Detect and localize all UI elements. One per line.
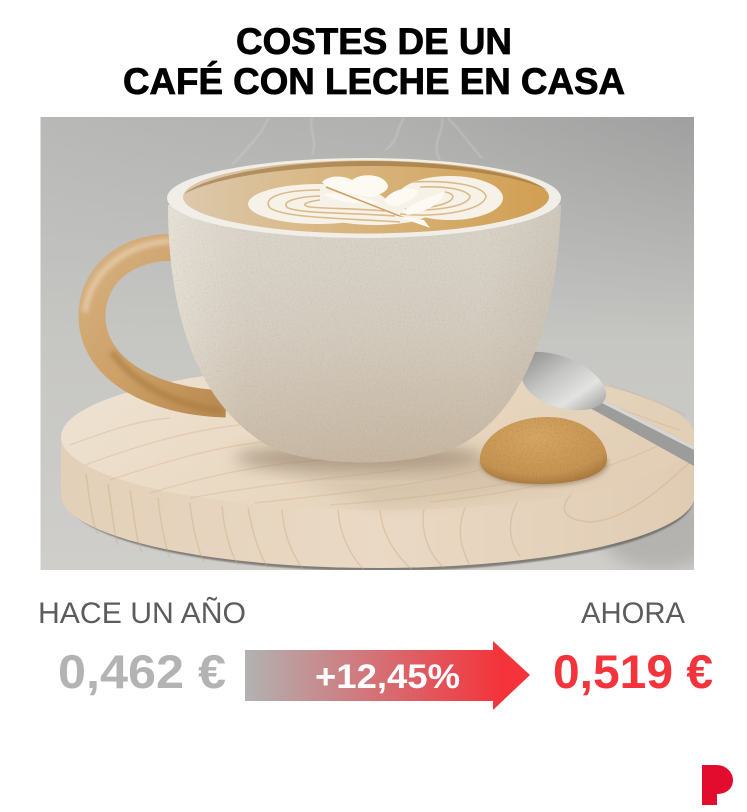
light patch and shadow on board [310, 465, 524, 508]
rosetta leaves [322, 175, 388, 197]
coffee surface [183, 160, 549, 234]
photo: cup of coffee on a wooden board [40, 117, 720, 571]
steam [232, 118, 482, 165]
arrow with percentage [245, 641, 530, 710]
spoon [521, 352, 694, 466]
label: hace un año: HACE UN AÑO [38, 596, 246, 630]
arrow with percentage: +12,45% [315, 658, 460, 696]
wooden board [61, 364, 695, 570]
value: current cost: 0,519 € [553, 645, 713, 698]
label: ahora: AHORA [581, 597, 685, 630]
title: CAFÉ CON LECHE EN CASA [123, 61, 625, 102]
cup body [160, 158, 570, 475]
value: previous cost: 0,462 € [58, 645, 226, 698]
cup shadow [235, 444, 485, 472]
cup rim [167, 158, 561, 238]
title [123, 21, 625, 102]
cookie [478, 415, 610, 487]
latte art [248, 175, 503, 228]
cup handle [85, 241, 226, 411]
logo [702, 765, 733, 805]
title: COSTES DE UN [236, 21, 512, 62]
